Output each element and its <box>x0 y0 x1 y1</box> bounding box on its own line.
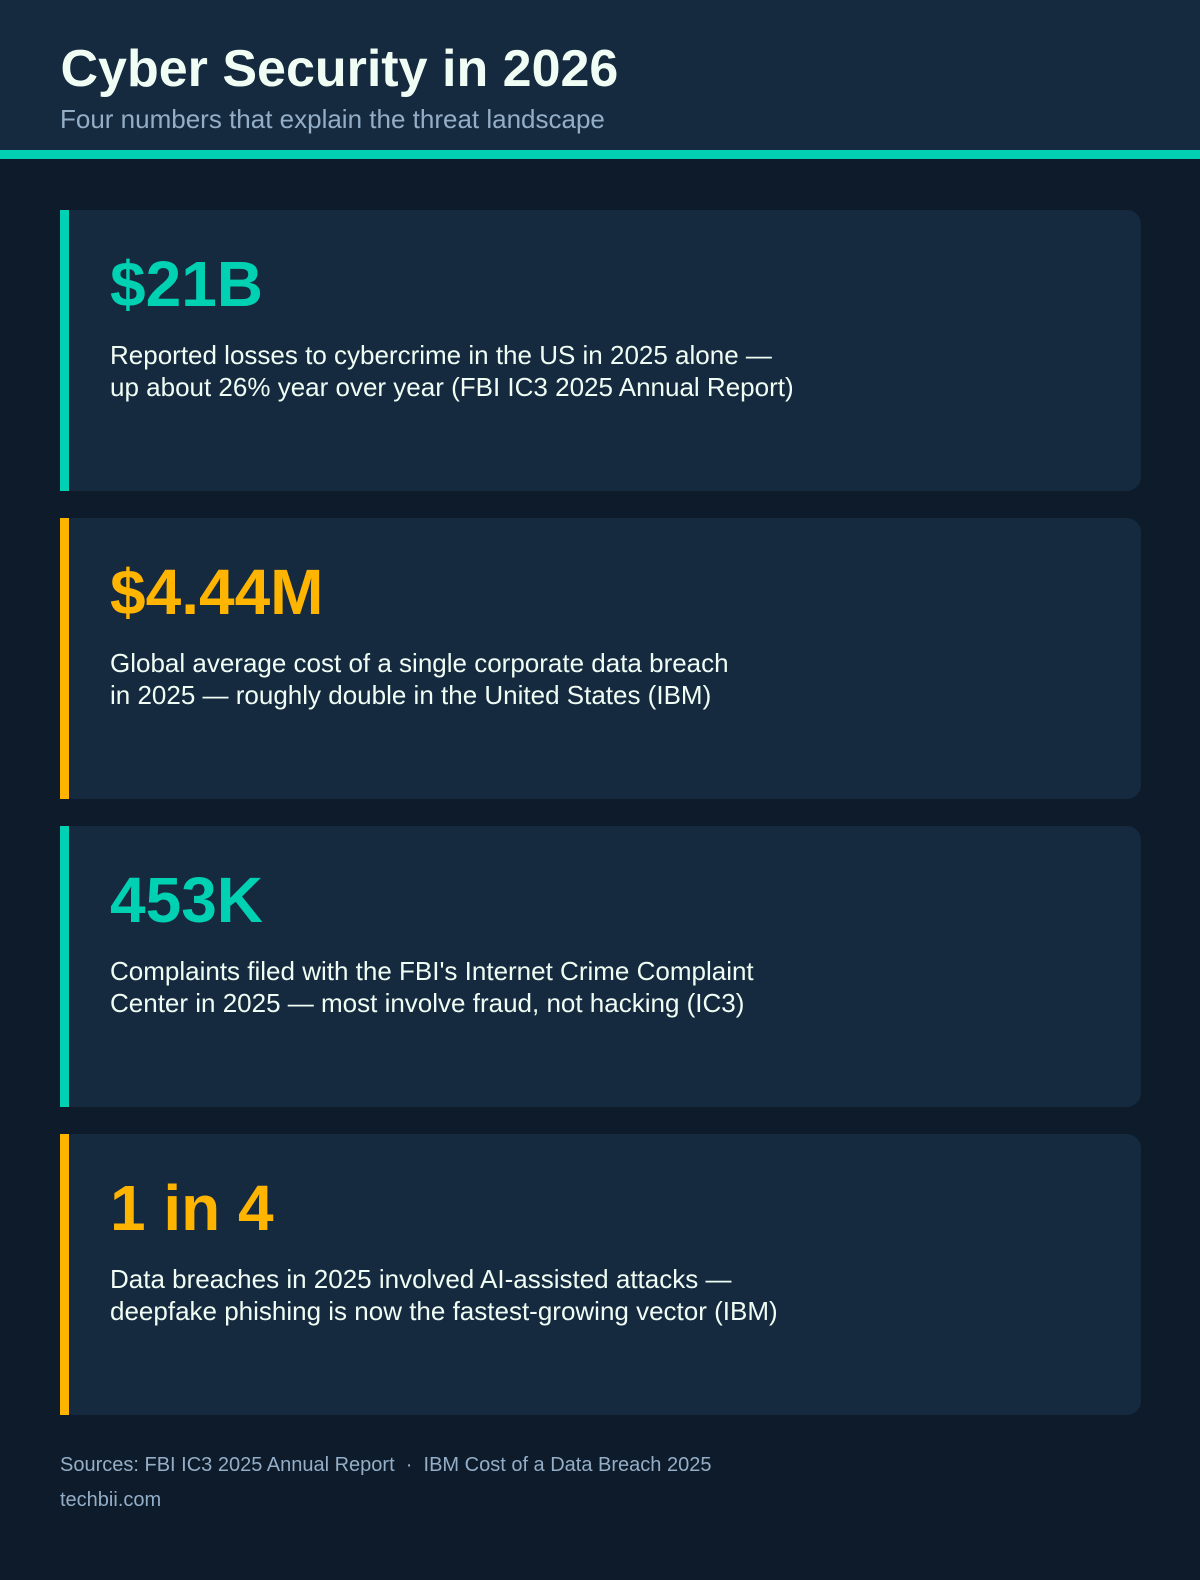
description: Global average cost of a single corporate data breach <box>110 648 729 678</box>
panel: 453K stat card <box>60 826 1141 1107</box>
subtitle: Four numbers that explain the threat landscape <box>60 104 605 134</box>
description: Data breaches in 2025 involved AI-assisted attacks — <box>110 1264 731 1294</box>
description: up about 26% year over year (FBI IC3 2025 Annual Report) <box>110 372 794 402</box>
footer sources: Sources: FBI IC3 2025 Annual Report · IBM Cost of a Data Breach 2025 <box>60 1454 711 1476</box>
stat number: $4.44M <box>110 556 323 628</box>
title: Cyber Security in 2026 <box>60 40 618 98</box>
footer site: techbii.com <box>60 1489 161 1511</box>
panel: 1 in 4 stat card <box>60 1134 1141 1415</box>
description: Center in 2025 — most involve fraud, not hacking (IC3) <box>110 988 744 1018</box>
description: Reported losses to cybercrime in the US in 2025 alone — <box>110 340 772 370</box>
description: in 2025 — roughly double in the United States (IBM) <box>110 680 711 710</box>
stat number: $21B <box>110 248 263 320</box>
stat number: 453K <box>110 864 263 936</box>
panel: $21B stat card <box>60 210 1141 491</box>
description: Complaints filed with the FBI's Internet Crime Complaint <box>110 956 754 986</box>
header band <box>0 0 1200 159</box>
panel: $4.44M stat card <box>60 518 1141 799</box>
stat number: 1 in 4 <box>110 1172 274 1244</box>
description: deepfake phishing is now the fastest-growing vector (IBM) <box>110 1296 778 1326</box>
